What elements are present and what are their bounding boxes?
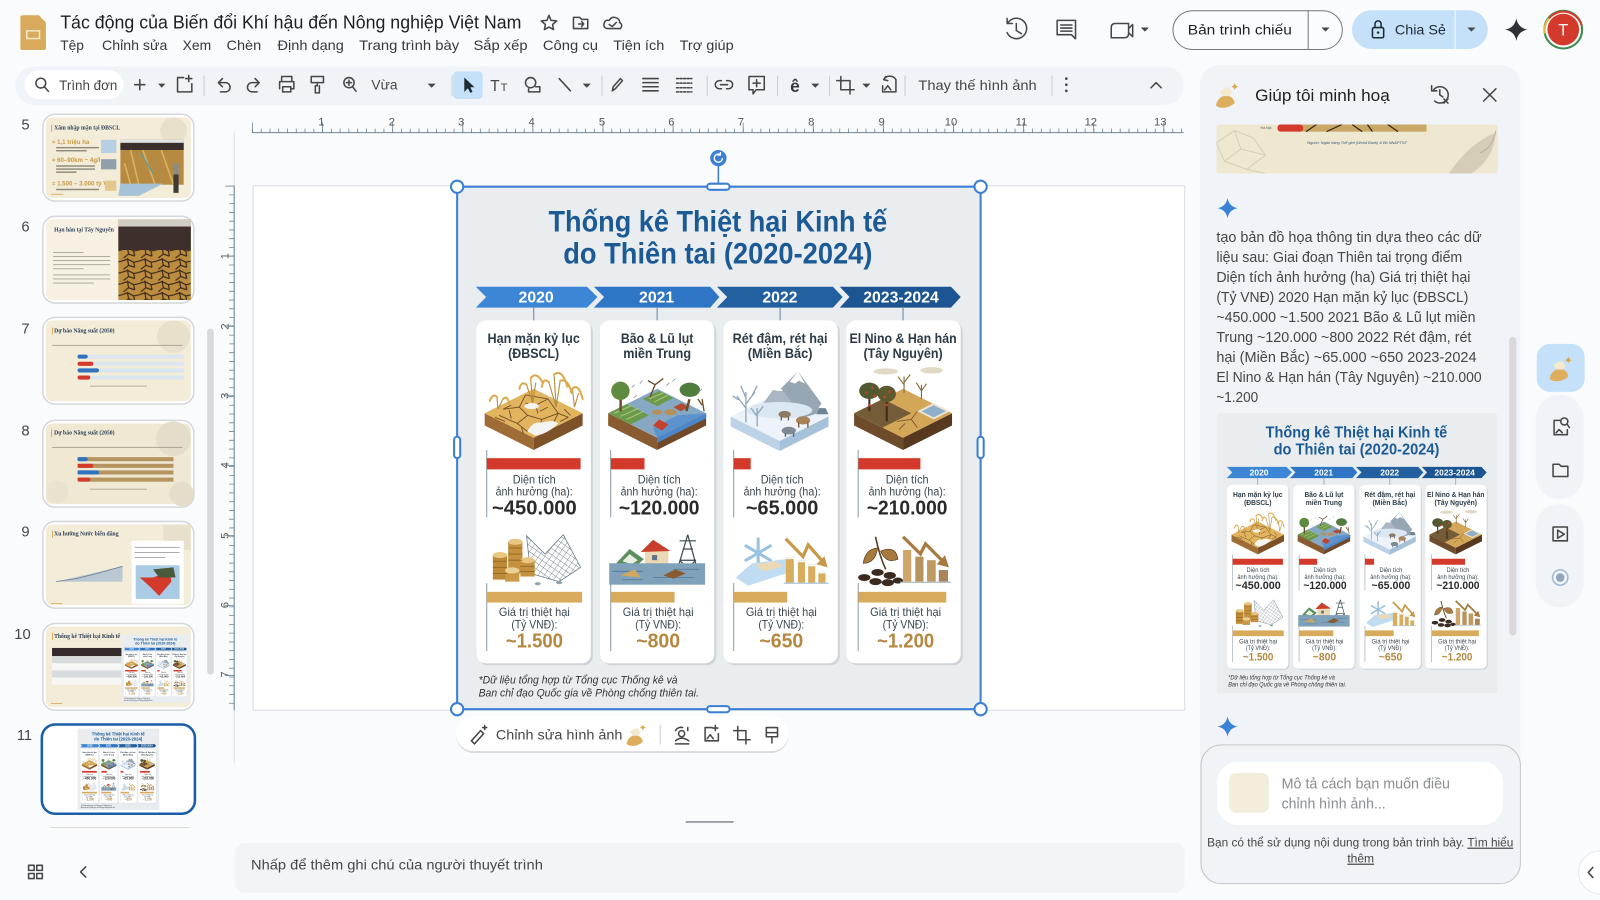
generated infographic preview: ~800 bbox=[1313, 651, 1336, 663]
prompt text: liệu sau: Giai đoạn Thiên tai trọng điểm bbox=[1216, 250, 1462, 266]
panel: help me illustrate bbox=[1200, 65, 1520, 884]
generated infographic preview: Ban chỉ đạo Quốc gia về Phòng chống thiên tai. bbox=[1228, 682, 1346, 689]
icon: more bbox=[1065, 79, 1068, 91]
footnote: *Dữ liệu tổng hợp từ Tổng cục Thống kê và bbox=[479, 674, 678, 686]
menu bar: Xem bbox=[183, 38, 211, 53]
button: share bbox=[1352, 10, 1488, 49]
slide canvas bbox=[253, 186, 1185, 710]
thumbnail 6: 6 bbox=[21, 220, 30, 236]
generated infographic preview: do Thiên tai (2020-2024) bbox=[1274, 441, 1439, 458]
damage label: Giá trị thiệt hại bbox=[870, 605, 941, 619]
icon: target circle bbox=[1553, 570, 1568, 585]
vertical ruler: 1 bbox=[220, 253, 232, 259]
chevron 2021: 2021 bbox=[639, 290, 674, 307]
generated infographic preview: Diện tích bbox=[1446, 567, 1470, 574]
illustration: frozen money bbox=[736, 539, 829, 586]
generated infographic preview: (Tỷ VNĐ): bbox=[1246, 645, 1271, 652]
card heading: Rét đậm, rét hại bbox=[733, 331, 828, 346]
area label: Diện tích bbox=[513, 472, 556, 486]
icon: select cursor bbox=[453, 71, 483, 99]
icon: move to folder bbox=[573, 17, 588, 29]
prompt text: Trung ~120.000 ~800 2022 Rét đậm, rét bbox=[1216, 330, 1471, 346]
menu bar bbox=[60, 37, 734, 53]
disclaimer: Bạn có thể sử dụng nội dung trong bản trình bày. bbox=[1207, 836, 1464, 850]
menu bar: Chèn bbox=[227, 38, 261, 53]
icon: star bbox=[541, 15, 557, 30]
button: slideshow bbox=[1173, 10, 1342, 49]
icon: text box: T bbox=[490, 78, 500, 95]
horizontal ruler: 8 bbox=[808, 117, 814, 129]
area label bbox=[744, 472, 821, 499]
generated infographic preview: ~1.200 bbox=[1442, 651, 1472, 663]
icon: paint roller bbox=[766, 728, 778, 743]
icon: blue sparkle bbox=[1217, 198, 1238, 218]
prompt text: hại (Miền Bắc) ~65.000 ~650 2023-2024 bbox=[1216, 349, 1477, 366]
icon: crop bbox=[734, 727, 750, 744]
thumbnail 9: Xu hướng Nước biển dâng bbox=[54, 531, 119, 538]
icon: Slides logo bbox=[20, 15, 46, 50]
damage value: ~1.500 bbox=[506, 631, 563, 653]
icon: collapse toolbar bbox=[1151, 83, 1161, 88]
floating image toolbar bbox=[456, 716, 789, 753]
damage label bbox=[623, 605, 694, 631]
menu bar: Sắp xếp bbox=[473, 37, 528, 53]
icon: line bbox=[559, 79, 570, 91]
edit image label: Chỉnh sửa hình ảnh bbox=[496, 727, 622, 743]
card heading: Bão & Lũ lụt bbox=[621, 331, 694, 346]
illustration: dry farm bbox=[854, 367, 952, 450]
prompt text: (Tỷ VNĐ) 2020 Hạn mặn kỷ lục (ĐBSCL) bbox=[1216, 290, 1468, 306]
area value: ~210.000 bbox=[867, 497, 947, 519]
generated infographic preview: ~65.000 bbox=[1372, 580, 1410, 592]
thumbnail 11 selected: 11 bbox=[17, 728, 32, 744]
menu bar: Trợ giúp bbox=[680, 38, 734, 53]
area bar bbox=[858, 458, 920, 469]
chevron 2022 bbox=[717, 287, 843, 308]
panel scrollbar bbox=[1509, 337, 1516, 636]
damage label: (Tỷ VNĐ): bbox=[883, 617, 929, 631]
app header bbox=[20, 10, 1582, 53]
thumbnail 5: ≈ 1,1 triệu ha bbox=[52, 139, 90, 146]
icon: add bbox=[135, 80, 145, 90]
prompt text bbox=[1216, 230, 1482, 406]
icon: add image bbox=[705, 726, 718, 741]
generated infographic preview: ảnh hưởng (ha): bbox=[1237, 573, 1279, 581]
damage label bbox=[499, 605, 570, 631]
generated infographic preview: ~1.500 bbox=[1243, 651, 1273, 663]
speaker notes: Nhấp để thêm ghi chú của người thuyết trình bbox=[251, 857, 543, 873]
icon: zoom dropdown bbox=[428, 84, 436, 88]
generated infographic preview: ~650 bbox=[1379, 651, 1402, 663]
card: 2022 cold bbox=[723, 320, 840, 665]
card heading bbox=[849, 331, 957, 361]
area label: Diện tích bbox=[886, 472, 929, 486]
generated infographic preview: ảnh hưởng (ha): bbox=[1370, 573, 1412, 581]
area label: ảnh hưởng (ha): bbox=[621, 485, 698, 499]
area label: ảnh hưởng (ha): bbox=[869, 485, 946, 499]
thumbnail 5: Xâm nhập mặn tại ĐBSCL bbox=[54, 125, 120, 132]
main toolbar bbox=[15, 66, 1184, 105]
thumbnail 5: ≈ 60–90km ~ 4g/l bbox=[52, 157, 101, 164]
horizontal ruler bbox=[252, 117, 1184, 133]
icon: zoom bbox=[344, 78, 356, 91]
prompt composer bbox=[1201, 745, 1520, 884]
card heading: (Tây Nguyên) bbox=[863, 346, 943, 361]
thumbnail 8 bbox=[21, 420, 194, 507]
document title: Tác động của Biến đổi Khí hậu đến Nông nghiệp Việt Nam bbox=[60, 12, 521, 33]
icon: add dropdown bbox=[158, 84, 165, 88]
area label: ảnh hưởng (ha): bbox=[496, 485, 573, 499]
thumbnail 7: Dự báo Năng suất (2050) bbox=[54, 328, 115, 335]
area value: ~65.000 bbox=[746, 497, 818, 519]
icon: grid view bbox=[29, 865, 42, 879]
area label bbox=[869, 472, 946, 499]
damage value: ~800 bbox=[636, 631, 680, 653]
icon: crop dropdown bbox=[862, 84, 870, 88]
infographic background bbox=[457, 187, 981, 709]
horizontal ruler: 6 bbox=[668, 117, 675, 129]
button: slideshow: Bản trình chiếu bbox=[1188, 23, 1292, 39]
thumbnail 10: Thống kê Thiệt hại Kinh tế bbox=[54, 633, 121, 640]
illustration: flooded house bbox=[609, 535, 705, 585]
damage bar bbox=[487, 592, 582, 603]
chevron 2023-2024 bbox=[840, 287, 961, 308]
damage label: Giá trị thiệt hại bbox=[746, 605, 817, 619]
horizontal ruler: 12 bbox=[1085, 117, 1097, 129]
generated infographic preview: ~120.000 bbox=[1303, 580, 1347, 592]
generated infographic preview: ~210.000 bbox=[1436, 580, 1480, 592]
generated infographic preview: Giá trị thiệt hại bbox=[1371, 638, 1410, 645]
resize divider bbox=[686, 821, 734, 823]
pill: addons top bbox=[1536, 395, 1584, 499]
disclaimer: thêm bbox=[1347, 852, 1374, 866]
generated infographic preview: ảnh hưởng (ha): bbox=[1437, 573, 1479, 581]
infographic: main bbox=[457, 187, 981, 709]
area value: ~120.000 bbox=[619, 497, 699, 519]
timeline chevrons bbox=[476, 287, 961, 308]
input placeholder bbox=[1282, 776, 1450, 812]
icon: alt dropdown bbox=[811, 84, 819, 88]
footnote bbox=[479, 674, 699, 700]
icon: comments bbox=[1057, 20, 1076, 39]
area label bbox=[621, 472, 698, 499]
prompt text: tạo bản đồ họa thông tin dựa theo các dữ bbox=[1216, 230, 1482, 246]
damage label: Giá trị thiệt hại bbox=[623, 605, 694, 619]
icon: redo bbox=[247, 79, 259, 92]
prompt text: ~450.000 ~1.500 2021 Bão & Lũ lụt miền bbox=[1216, 310, 1476, 326]
generated infographic preview: (ĐBSCL) bbox=[1244, 498, 1272, 507]
chevron 2023-2024: 2023-2024 bbox=[863, 290, 939, 307]
vertical ruler: 7 bbox=[220, 671, 232, 678]
avatar: T bbox=[1558, 22, 1568, 40]
icon: gemini spark bbox=[1505, 18, 1528, 41]
rotate handle bbox=[710, 150, 727, 166]
card heading bbox=[621, 331, 694, 361]
icon: border weight bbox=[643, 79, 658, 91]
infographic title: do Thiên tai (2020-2024) bbox=[563, 237, 872, 270]
area label: Diện tích bbox=[638, 472, 681, 486]
icon: pen bbox=[612, 79, 622, 91]
illustration: coins and net bbox=[493, 535, 581, 585]
icon: text box bbox=[490, 78, 508, 95]
generated infographic preview: *Dữ liệu tổng hợp từ Tổng cục Thống kê và bbox=[1228, 674, 1335, 681]
generated infographic preview bbox=[1217, 413, 1497, 693]
generated infographic preview: ảnh hưởng (ha): bbox=[1304, 573, 1346, 581]
illustration: coffee and chart bbox=[858, 537, 951, 586]
icon: folder bbox=[1553, 464, 1568, 477]
horizontal ruler: 3 bbox=[458, 117, 464, 129]
generated infographic preview: miền Trung bbox=[1306, 498, 1343, 507]
thumbnail 10 bbox=[14, 623, 194, 710]
button: collapse panel bbox=[1579, 851, 1600, 894]
illustration: drought bbox=[485, 373, 583, 450]
area value: ~450.000 bbox=[492, 497, 577, 519]
icon: play box bbox=[1553, 527, 1567, 541]
thumbnail 6: Hạn hán tại Tây Nguyên bbox=[54, 228, 115, 234]
generated infographic preview: 2023-2024 bbox=[1434, 467, 1475, 477]
icon: meet dropdown bbox=[1141, 28, 1149, 32]
vertical ruler: 2 bbox=[220, 323, 232, 330]
card heading: (Miền Bắc) bbox=[748, 344, 813, 361]
selection frame bbox=[451, 150, 987, 715]
damage label bbox=[870, 605, 941, 631]
generated infographic preview: (Tỷ VNĐ): bbox=[1378, 645, 1403, 652]
side rail bbox=[1536, 344, 1600, 894]
previous generated image crop: Nguồn: Ngân hàng Thế giới (World Bank) & Bộ NN&PTNT bbox=[1307, 140, 1408, 145]
icon: line dropdown bbox=[583, 84, 591, 88]
chevron 2020 bbox=[476, 287, 597, 308]
thumbnail 11 selected bbox=[17, 724, 195, 814]
icon: add comment bbox=[749, 77, 764, 94]
generated infographic preview: Diện tích bbox=[1379, 567, 1403, 574]
area bar bbox=[487, 458, 581, 469]
button: share: Chia Sẻ bbox=[1395, 23, 1446, 39]
footnote: Ban chỉ đạo Quốc gia về Phòng chống thiên tai. bbox=[479, 688, 699, 700]
thumbnail 9 bbox=[21, 521, 194, 608]
damage label: (Tỷ VNĐ): bbox=[635, 617, 681, 631]
speaker notes bbox=[235, 822, 1185, 893]
avatar bbox=[1544, 11, 1582, 48]
horizontal ruler: 4 bbox=[529, 117, 535, 129]
menu bar: Công cụ bbox=[543, 38, 598, 53]
card: 2023-2024 El Nino bbox=[846, 320, 963, 665]
generated infographic preview: Diện tích bbox=[1314, 567, 1337, 574]
generated infographic preview: Giá trị thiệt hại bbox=[1305, 638, 1344, 645]
previous generated image crop: Hà Nội bbox=[1261, 126, 1272, 130]
icon: reset image bbox=[883, 76, 896, 92]
damage bar bbox=[611, 592, 675, 603]
horizontal ruler: 11 bbox=[1016, 117, 1027, 129]
icon: meet camera bbox=[1111, 23, 1133, 38]
filmstrip scrollbar bbox=[207, 329, 214, 674]
generated infographic preview: Bão & Lũ lụt bbox=[1305, 490, 1344, 499]
disclaimer bbox=[1207, 836, 1513, 866]
card heading: miền Trung bbox=[623, 346, 691, 361]
menu bar: Trang trình bày bbox=[359, 38, 459, 53]
horizontal ruler: 2 bbox=[389, 117, 395, 129]
infographic title bbox=[548, 206, 888, 270]
horizontal ruler: 9 bbox=[879, 117, 885, 129]
generated infographic preview: Hạn mặn kỷ lục bbox=[1233, 490, 1283, 499]
icon: collapse filmstrip bbox=[81, 867, 86, 877]
pill: addons bottom bbox=[1536, 504, 1584, 607]
icon: cloud saved bbox=[604, 17, 622, 29]
generated infographic preview: Thống kê Thiệt hại Kinh tế bbox=[1266, 424, 1447, 441]
generated infographic preview: (Miền Bắc) bbox=[1372, 498, 1408, 507]
thumbnail 5: 5 bbox=[21, 118, 30, 134]
icon: text box: T bbox=[501, 82, 508, 94]
generated infographic preview: Giá trị thiệt hại bbox=[1438, 638, 1477, 645]
chevron 2021 bbox=[594, 287, 719, 308]
icon: version history bbox=[1007, 18, 1027, 39]
generated infographic preview: 2020 bbox=[1250, 467, 1269, 477]
damage value: ~650 bbox=[759, 631, 803, 653]
generated infographic preview: ~450.000 bbox=[1235, 580, 1281, 592]
damage label: (Tỷ VNĐ): bbox=[511, 617, 557, 631]
menu bar: Chỉnh sửa bbox=[102, 38, 168, 53]
damage bar bbox=[734, 592, 787, 603]
illustration: frozen land bbox=[731, 371, 829, 451]
icon: shape bbox=[526, 78, 540, 92]
thumbnail 6 bbox=[21, 216, 194, 303]
panel icon: banana bbox=[1216, 83, 1238, 108]
image placeholder bbox=[1229, 773, 1269, 813]
icon: edit wand bbox=[471, 726, 487, 744]
panel title: Giúp tôi minh hoạ bbox=[1255, 86, 1390, 105]
card: 2020 salinity bbox=[477, 320, 593, 665]
thumbnail 8: 8 bbox=[21, 424, 30, 440]
card: 2021 storm and flood bbox=[600, 320, 716, 665]
damage label: (Tỷ VNĐ): bbox=[758, 617, 804, 631]
generated infographic preview: Giá trị thiệt hại bbox=[1239, 638, 1278, 645]
generated infographic preview: El Nino & Hạn hán bbox=[1427, 490, 1485, 499]
horizontal ruler: 7 bbox=[738, 117, 744, 129]
icon: loading sparkle bbox=[1217, 716, 1238, 737]
card heading: El Nino & Hạn hán bbox=[849, 331, 957, 346]
icon: crop bbox=[837, 77, 854, 94]
damage bar bbox=[858, 592, 946, 603]
prompt text: El Nino & Hạn hán (Tây Nguyên) ~210.000 bbox=[1216, 370, 1482, 386]
infographic title: Thống kê Thiệt hại Kinh tế bbox=[548, 206, 888, 239]
generated infographic preview: Diện tích bbox=[1247, 567, 1270, 574]
filmstrip bbox=[14, 114, 214, 879]
prompt text: Diện tích ảnh hưởng (ha) Giá trị thiệt hại bbox=[1216, 270, 1470, 286]
damage label bbox=[746, 605, 817, 631]
vertical ruler bbox=[220, 133, 234, 763]
icon: link bbox=[715, 81, 733, 89]
thumbnail 10: 10 bbox=[14, 627, 31, 643]
generated infographic preview: (Tỷ VNĐ): bbox=[1312, 645, 1337, 652]
area label: ảnh hưởng (ha): bbox=[744, 485, 821, 499]
icon: banana bbox=[627, 724, 646, 746]
icon: subject bbox=[676, 727, 689, 744]
rulers bbox=[220, 117, 1184, 763]
generated infographic preview: 2021 bbox=[1314, 467, 1333, 477]
input box bbox=[1217, 762, 1503, 825]
horizontal ruler: 5 bbox=[599, 117, 605, 129]
icon: border dash bbox=[677, 79, 692, 92]
area bar bbox=[611, 458, 644, 469]
card heading bbox=[488, 331, 580, 361]
icon: undo bbox=[218, 79, 230, 92]
vertical ruler: 5 bbox=[220, 533, 232, 539]
thumbnail 8: Dự báo Năng suất (2050) bbox=[54, 430, 115, 437]
generated infographic preview: (Tỷ VNĐ): bbox=[1445, 645, 1470, 652]
area label: Diện tích bbox=[761, 472, 804, 486]
illustration: flood bbox=[608, 379, 706, 450]
icon: new slide bbox=[178, 76, 192, 92]
search menus pill: Trình đơn bbox=[59, 78, 117, 94]
menu bar: Định dạng bbox=[278, 38, 344, 53]
thumbnail 7 bbox=[21, 317, 194, 404]
menu bar: Tiện ích bbox=[613, 38, 664, 53]
thumbnail 7: 7 bbox=[21, 322, 30, 338]
previous generated image crop bbox=[1216, 124, 1498, 173]
horizontal ruler: 13 bbox=[1154, 117, 1166, 129]
input placeholder: chỉnh hình ảnh... bbox=[1282, 796, 1386, 812]
generated infographic preview: 2022 bbox=[1380, 467, 1399, 477]
zoom value: Vừa bbox=[371, 77, 398, 92]
icon: paint format bbox=[311, 77, 323, 93]
thumbnail 5: ≈ 1.500 – 3.000 tỷ VNĐ bbox=[52, 181, 117, 188]
vertical ruler: 3 bbox=[220, 393, 232, 399]
damage label: Giá trị thiệt hại bbox=[499, 605, 570, 619]
disclaimer: Tìm hiểu bbox=[1467, 836, 1513, 850]
prompt text: ~1.200 bbox=[1216, 390, 1258, 406]
icon: image search bbox=[1554, 418, 1569, 435]
chevron 2020: 2020 bbox=[519, 290, 554, 307]
vertical ruler: 6 bbox=[220, 602, 232, 608]
generated infographic preview: Rét đậm, rét hại bbox=[1364, 490, 1415, 499]
card heading: (ĐBSCL) bbox=[508, 346, 559, 361]
generated infographic preview: (Tây Nguyên) bbox=[1435, 498, 1477, 507]
icon: clear history bbox=[1432, 86, 1448, 103]
button: banana active bbox=[1537, 344, 1585, 392]
horizontal ruler: 10 bbox=[945, 117, 957, 129]
vertical ruler: 4 bbox=[220, 462, 232, 468]
card heading: Hạn mặn kỷ lục bbox=[488, 331, 580, 346]
chevron 2022: 2022 bbox=[762, 290, 798, 307]
search menus pill bbox=[24, 70, 123, 99]
replace image button: Thay thế hình ảnh bbox=[918, 78, 1037, 93]
menu bar: Tệp bbox=[60, 38, 84, 53]
area label bbox=[496, 472, 573, 499]
area bar bbox=[734, 458, 751, 469]
input placeholder: Mô tả cách bạn muốn điều bbox=[1282, 776, 1450, 792]
thumbnail 5 bbox=[21, 114, 194, 201]
icon: print bbox=[280, 77, 294, 92]
card heading bbox=[733, 331, 828, 361]
thumbnail 9: 9 bbox=[21, 525, 30, 541]
icon: alt text a: ê bbox=[790, 76, 800, 96]
icon: close bbox=[1484, 89, 1496, 101]
horizontal ruler: 1 bbox=[318, 117, 325, 129]
damage value: ~1.200 bbox=[877, 631, 934, 653]
